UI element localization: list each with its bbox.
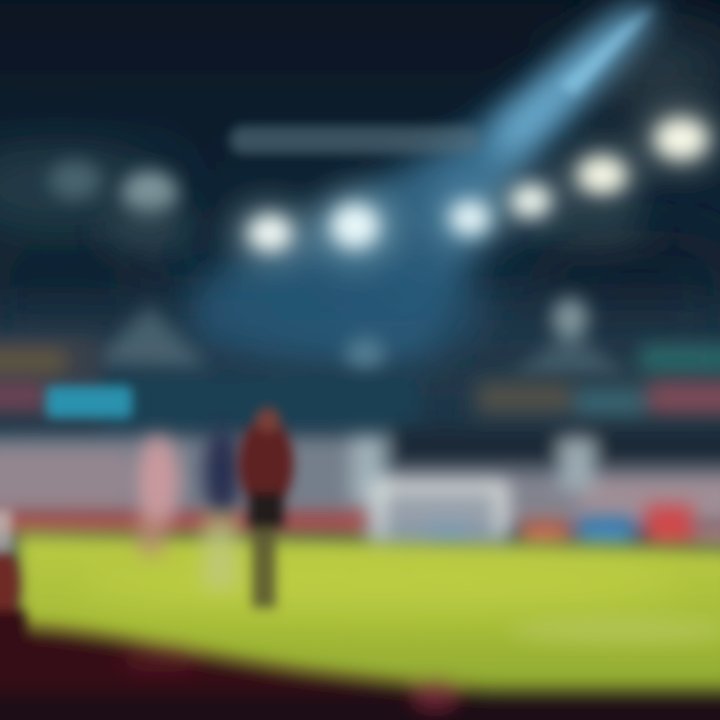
- foreground: dark crowd: [0, 627, 720, 720]
- foreground spectator at left edge: [0, 510, 26, 660]
- advertising boards: [0, 505, 720, 548]
- pitch highlight: [80, 557, 680, 613]
- blurred banner in sky: [230, 126, 480, 154]
- player: dark red kit: [238, 408, 294, 608]
- cyan advertising board: [46, 386, 132, 418]
- crowd: [0, 428, 720, 528]
- player: navy kit: [203, 426, 240, 590]
- beam core: [495, 5, 658, 165]
- goal: [370, 482, 510, 540]
- roof haze: [0, 30, 720, 430]
- player: pink kit: [136, 436, 180, 555]
- stand band: [0, 335, 720, 435]
- upper stand structures: [90, 298, 630, 378]
- floodlights: [49, 105, 720, 267]
- pitch: [15, 532, 720, 720]
- beam tip: [560, 6, 656, 95]
- light beam: [190, 5, 660, 370]
